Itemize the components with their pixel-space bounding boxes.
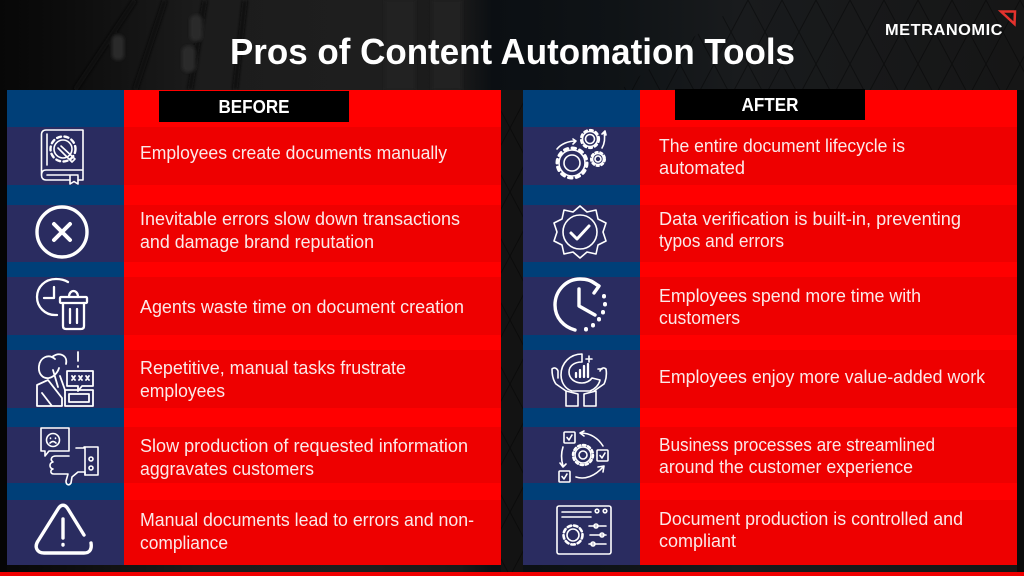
icon: hands holding growth chart — [552, 354, 606, 406]
text: slow production — [140, 436, 468, 479]
text: value-added work: Employees enjoy more value-added work — [659, 367, 986, 387]
text: data verification — [659, 209, 961, 251]
text: repetitive tasks: Repetitive, manual tasks frustrate — [140, 358, 406, 378]
text: manual documents: Manual documents lead to errors and non- — [140, 510, 474, 530]
text: business processes — [659, 435, 935, 477]
text: inevitable errors: Inevitable errors slow down transactions — [140, 209, 460, 229]
text: document production — [659, 509, 963, 551]
text: slow production: aggravates customers — [140, 459, 314, 479]
text: more time with customers: customers — [659, 308, 740, 328]
text: lifecycle automated — [659, 136, 905, 178]
icon: unhappy customer thumbs down — [41, 428, 98, 485]
text: agents waste time: Agents waste time on document creation — [140, 297, 464, 317]
text: manual documents: compliance — [140, 533, 228, 553]
heading: after — [675, 89, 865, 120]
icon: control panel window — [557, 506, 611, 554]
icon: clock with circular arrow — [555, 279, 605, 330]
text: document production: Document production is controlled and — [659, 509, 963, 529]
text: employees create documents manually: Employees create documents manually — [140, 143, 447, 163]
text: lifecycle automated: The entire document lifecycle is — [659, 136, 905, 156]
footer strip — [0, 572, 1024, 576]
panel: after — [523, 89, 1017, 565]
text: data verification: Data verification is built-in, preventing — [659, 209, 961, 229]
icon: streamlined process cycle — [559, 431, 608, 482]
icon: manual book with gear and wrench — [42, 130, 83, 184]
text: document production: compliant — [659, 531, 736, 551]
text: business processes: Business processes are streamlined — [659, 435, 935, 455]
text: inevitable errors — [140, 209, 460, 252]
text: manual documents — [140, 510, 474, 553]
logo: Metranomic: METRANOMIC — [885, 22, 1003, 39]
icon: error cross in circle — [37, 207, 87, 257]
heading: before — [159, 91, 349, 122]
text: slow production: Slow production of requested information — [140, 436, 468, 456]
icon: automated gears — [557, 130, 606, 178]
text: repetitive tasks: employees — [140, 381, 225, 401]
text: more time with customers: Employees spend more time with — [659, 286, 921, 306]
text: business processes: around the customer experience — [659, 457, 913, 477]
text: repetitive tasks — [140, 358, 406, 401]
text: data verification: typos and errors — [659, 231, 784, 251]
heading: after: AFTER — [742, 95, 798, 115]
heading: before: BEFORE — [218, 97, 290, 117]
text: more time with customers — [659, 286, 921, 328]
text: inevitable errors: and damage brand reputation — [140, 232, 374, 252]
icon: warning triangle — [36, 505, 91, 553]
icon: clock and trash can — [37, 279, 87, 329]
icon: frustrated employee at desk — [37, 352, 93, 406]
panel: before — [7, 90, 501, 565]
title: Pros of Content Automation Tools — [230, 31, 795, 72]
logo: Metranomic — [885, 12, 1015, 39]
icon: verified badge — [554, 206, 606, 258]
text: lifecycle automated: automated — [659, 158, 745, 178]
